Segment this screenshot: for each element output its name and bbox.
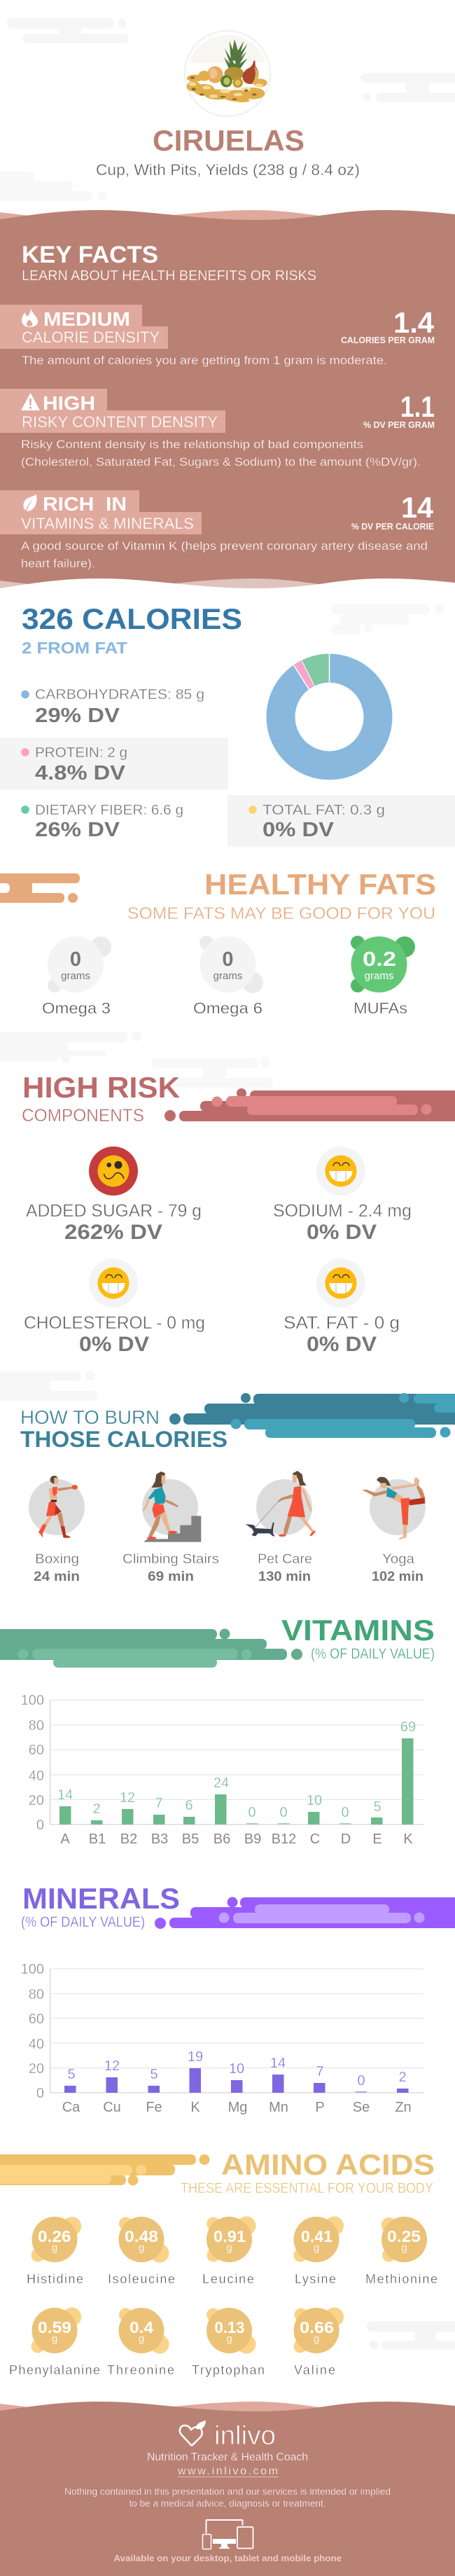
icon: happy face <box>98 1268 129 1299</box>
panel: amino acids <box>0 2148 438 2377</box>
bars <box>59 1738 413 1824</box>
subheading: healthy fats: SOME FATS MAY BE GOOD FOR YOU <box>127 904 435 923</box>
category labels <box>62 2100 412 2115</box>
subheading: percent of daily value: (% OF DAILY VALUE) <box>21 1914 145 1930</box>
icon: woman walking dog <box>246 1471 316 1537</box>
legend: dietary fiber: DIETARY FIBER: 6.6 g <box>35 803 183 818</box>
amino: isoleucine: g <box>139 2242 144 2254</box>
category labels: B9 <box>244 1831 261 1847</box>
decorative cloud: left below subtitle <box>0 172 106 201</box>
description: The amount of calories you are getting from 1 gram is moderate. <box>22 354 387 367</box>
y axis labels: 40 <box>29 2037 44 2052</box>
badge: omega 3 <box>42 936 111 1017</box>
value labels: 0 <box>279 1805 288 1820</box>
y axis labels: 60 <box>29 2011 44 2027</box>
heading: healthy fats: HEALTHY FATS <box>204 868 436 901</box>
badge: omega 3: 0 <box>70 948 81 971</box>
risk item: sodium: SODIUM - 2.4 mg <box>273 1201 412 1221</box>
badge: MUFAs: MUFAs <box>354 999 407 1017</box>
description: heart failure). <box>21 557 95 570</box>
fact: medium calorie density <box>0 305 435 367</box>
activity: yoga: Yoga <box>382 1552 414 1567</box>
description <box>21 438 421 469</box>
amino: lysine: g <box>314 2242 319 2254</box>
risk item: sodium: 0% DV <box>307 1221 377 1244</box>
disclaimer <box>64 2486 391 2509</box>
bars <box>64 2068 409 2093</box>
amino: methionine: g <box>401 2242 407 2254</box>
panel: how to burn <box>20 1393 455 1584</box>
value labels: 0 <box>341 1805 349 1820</box>
badge: omega 3: Omega 3 <box>42 999 111 1017</box>
amino: lysine: 0.41 <box>301 2227 332 2245</box>
decorative cloud: top left <box>7 18 129 43</box>
y axis labels: 0 <box>36 1817 44 1833</box>
amino: histidine: g <box>52 2242 57 2254</box>
label: vitamins and minerals: VITAMINS & MINERALS <box>21 515 194 532</box>
category labels: Mn <box>269 2100 288 2115</box>
decorative band: orange <box>0 873 80 903</box>
decorative band: red <box>164 1088 455 1121</box>
value labels: 24 <box>214 1775 229 1791</box>
icon: flame <box>22 308 38 327</box>
risk item: cholesterol <box>24 1259 205 1356</box>
activity: climbing stairs <box>122 1471 219 1584</box>
food photo <box>185 31 270 116</box>
amino: tryptophan <box>192 2308 265 2377</box>
chart grid <box>50 1700 424 1824</box>
amino: valine: Valine <box>294 2363 335 2377</box>
decorative band: green <box>0 1629 302 1668</box>
wave: key facts bottom <box>0 579 455 600</box>
y axis labels: 80 <box>29 1987 44 2002</box>
amino: isoleucine <box>108 2217 175 2286</box>
subheading: percent of daily value: (% OF DAILY VALUE) <box>311 1646 435 1662</box>
activity: boxing <box>29 1476 85 1584</box>
unit: % DV per calorie: % DV PER CALORIE <box>351 521 434 532</box>
y axis labels: 40 <box>29 1768 44 1784</box>
category labels: K <box>403 1831 413 1847</box>
icon: warning triangle <box>21 393 40 410</box>
legend: dietary fiber: 26% DV <box>35 819 120 841</box>
unit: calories per gram: CALORIES PER GRAM <box>341 335 435 345</box>
risk item: sodium <box>273 1147 412 1244</box>
category labels: B2 <box>120 1831 137 1847</box>
decorative band: yellow <box>0 2154 210 2185</box>
description: (Cholesterol, Saturated Fat, Sugars & Sodium) to the amount (%DV/gr). <box>21 455 421 469</box>
label: risky content density: RISKY CONTENT DENSITY <box>22 413 218 431</box>
category labels: C <box>310 1831 320 1847</box>
amino: threonine: g <box>139 2333 144 2345</box>
risk item: saturated fat: SAT. FAT - 0 g <box>284 1313 400 1333</box>
legend: protein: 4.8% DV <box>35 762 126 784</box>
value labels: 7 <box>316 2064 324 2079</box>
badge: omega 6 <box>193 936 263 1017</box>
y axis labels: 20 <box>29 1793 44 1808</box>
risk item: added sugar: 262% DV <box>64 1221 162 1244</box>
amino: histidine: Histidine <box>27 2272 83 2286</box>
category labels: Zn <box>395 2100 412 2115</box>
value labels: 0 <box>248 1805 256 1820</box>
heading: those calories: THOSE CALORIES <box>20 1427 227 1452</box>
activity: climbing stairs: 69 min <box>148 1570 194 1584</box>
y axis labels: 0 <box>36 2086 44 2101</box>
category labels: K <box>190 2100 200 2115</box>
value labels: 2 <box>92 1801 101 1817</box>
y axis labels: 100 <box>21 1693 44 1708</box>
legend: total fat: 0% DV <box>262 819 335 841</box>
category labels: Ca <box>62 2100 80 2115</box>
category labels: B3 <box>151 1831 168 1847</box>
value labels: 12 <box>120 1790 135 1806</box>
amino: histidine: 0.26 <box>38 2227 71 2245</box>
activity: yoga: 102 min <box>372 1570 424 1584</box>
decorative cloud: top right <box>360 73 455 102</box>
icon: leaf <box>23 494 36 511</box>
amino: threonine: 0.4 <box>130 2318 153 2336</box>
heading: how to burn: HOW TO BURN <box>20 1406 160 1428</box>
risk item: saturated fat <box>284 1259 400 1356</box>
icon: devices <box>203 2520 253 2549</box>
legend: protein <box>0 738 228 789</box>
disclaimer: to be a medical advice, diagnosis or treatment. <box>129 2498 326 2509</box>
icon: yoga pose <box>362 1477 425 1539</box>
amino: methionine <box>365 2217 438 2286</box>
amino: tryptophan: g <box>226 2333 232 2345</box>
amino: valine: 0.66 <box>300 2318 334 2336</box>
website link: www.inlivo.com <box>177 2465 278 2477</box>
label: calorie density: CALORIE DENSITY <box>22 328 160 346</box>
amino: lysine: Lysine <box>295 2272 336 2286</box>
amino: tryptophan: Tryptophan <box>192 2363 265 2377</box>
value labels: 5 <box>373 1799 382 1815</box>
heading: high risk: HIGH RISK <box>22 1071 180 1104</box>
activity: pet care: Pet Care <box>258 1552 312 1567</box>
amino: threonine <box>107 2308 174 2377</box>
y axis labels <box>21 1693 44 1833</box>
amino: valine: g <box>314 2333 319 2345</box>
amino: phenylalanine: 0.59 <box>38 2318 71 2336</box>
decorative cloud: beside calories <box>331 604 444 635</box>
y axis labels: 20 <box>29 2061 44 2077</box>
value labels <box>57 1719 416 1820</box>
amino: leucine: 0.91 <box>214 2227 246 2245</box>
logo: inlivo wordmark: inlivo <box>214 2421 276 2451</box>
value labels: 10 <box>229 2061 244 2077</box>
badge: MUFAs: grams <box>365 970 393 982</box>
subheading: components: COMPONENTS <box>22 1106 144 1126</box>
panel: key facts <box>0 210 455 588</box>
icon: happy face <box>325 1156 357 1186</box>
value labels: 19 <box>188 2049 203 2065</box>
number: 14: 14 <box>401 491 434 524</box>
disclaimer: Nothing contained in this presentation and our services is intended or implied <box>64 2486 391 2497</box>
heading: vitamins: VITAMINS <box>281 1614 435 1647</box>
number: 1.1: 1.1 <box>400 390 435 423</box>
heading: amino acids: AMINO ACIDS <box>221 2148 435 2181</box>
amino: tryptophan: 0.13 <box>214 2318 245 2336</box>
amino: histidine <box>27 2217 83 2286</box>
badge: omega 3: grams <box>61 970 90 982</box>
heading: minerals: MINERALS <box>22 1882 180 1915</box>
unit: % DV per gram: % DV PER GRAM <box>363 420 435 430</box>
decorative cloud: below fats <box>0 1032 141 1062</box>
y axis labels: 100 <box>21 1962 44 1977</box>
fact: high risky content density <box>0 389 435 469</box>
subheading: 2 from fat: 2 FROM FAT <box>22 639 127 657</box>
risk item: cholesterol: CHOLESTEROL - 0 mg <box>24 1313 205 1333</box>
panel: footer <box>0 2402 455 2576</box>
panel: healthy fats <box>0 868 436 1017</box>
risk item: cholesterol: 0% DV <box>79 1333 149 1356</box>
amino: isoleucine: 0.48 <box>125 2227 158 2245</box>
value labels: 14 <box>270 2056 286 2071</box>
amino: phenylalanine: g <box>52 2333 57 2345</box>
panel: calories <box>0 602 455 847</box>
icon: sad face <box>98 1156 129 1186</box>
category labels: D <box>341 1831 351 1847</box>
decorative cloud: above burn <box>0 1371 97 1401</box>
activity: pet care <box>246 1471 316 1584</box>
amino: methionine: Methionine <box>365 2272 438 2286</box>
value labels: 14 <box>57 1787 73 1803</box>
category labels: Fe <box>146 2100 162 2115</box>
category labels: E <box>372 1831 382 1847</box>
wave: footer top <box>0 2402 455 2576</box>
category labels: P <box>315 2100 325 2115</box>
category labels: Se <box>353 2100 370 2115</box>
badge: omega 6: Omega 6 <box>193 999 262 1017</box>
legend: carbohydrates <box>21 687 204 727</box>
legend: total fat: TOTAL FAT: 0.3 g <box>262 803 385 818</box>
amino: phenylalanine: Phenylalanine <box>9 2363 100 2377</box>
description: Risky Content density is the relationship of bad components <box>21 438 363 451</box>
donut chart <box>281 654 378 766</box>
legend: protein: PROTEIN: 2 g <box>35 745 127 761</box>
icon: woman on stairs <box>142 1471 201 1542</box>
legend: total fat <box>227 795 455 847</box>
badge: MUFAs <box>351 936 415 1017</box>
legend: carbohydrates: 29% DV <box>35 705 120 727</box>
category labels <box>60 1831 413 1847</box>
value labels: 12 <box>104 2058 120 2074</box>
y axis labels: 60 <box>29 1743 44 1758</box>
icon: boxer <box>38 1476 78 1538</box>
description <box>21 539 428 570</box>
category labels: A <box>60 1831 70 1847</box>
amino: isoleucine: Isoleucine <box>108 2272 175 2286</box>
value labels <box>67 2049 407 2089</box>
category labels: Cu <box>103 2100 121 2115</box>
amino: threonine: Threonine <box>107 2363 174 2377</box>
title: CIRUELAS <box>153 124 304 157</box>
amino: leucine: g <box>226 2242 232 2254</box>
category labels: Mg <box>228 2100 247 2115</box>
legend: dietary fiber <box>21 803 183 841</box>
decorative band: teal <box>169 1393 455 1438</box>
tagline: Nutrition Tracker & Health Coach <box>147 2451 308 2463</box>
y axis labels: 80 <box>29 1718 44 1733</box>
risk item: saturated fat: 0% DV <box>307 1333 377 1356</box>
value labels: 0 <box>357 2073 365 2089</box>
icon: happy face <box>325 1268 357 1299</box>
category labels: B1 <box>89 1831 106 1847</box>
risk item: added sugar <box>26 1147 202 1244</box>
legend: carbohydrates: CARBOHYDRATES: 85 g <box>35 687 204 702</box>
amino: leucine: Leucine <box>202 2272 254 2286</box>
y axis labels <box>21 1962 44 2101</box>
decorative band: purple <box>155 1897 455 1929</box>
number: 1.4: 1.4 <box>393 306 435 339</box>
bar chart: vitamins <box>21 1693 424 1847</box>
label: rich in: RICH IN <box>43 493 127 515</box>
decorative cloud: high risk <box>151 1058 273 1088</box>
panel: high risk <box>22 1071 455 1356</box>
badge: omega 6: grams <box>214 970 242 982</box>
wave: key facts top <box>0 210 455 588</box>
decorative cloud: amino right <box>367 2321 455 2350</box>
serving subtitle: Cup, With Pits, Yields (238 g / 8.4 oz) <box>96 161 360 179</box>
category labels: B12 <box>272 1831 296 1847</box>
subheading: key facts: LEARN ABOUT HEALTH BENEFITS OR RISKS <box>22 268 316 284</box>
logo: inlivo heart <box>180 2421 206 2446</box>
amino: phenylalanine <box>9 2307 100 2377</box>
description: A good source of Vitamin K (helps prevent coronary artery disease and <box>21 539 428 553</box>
label: high: HIGH <box>43 392 95 414</box>
amino: valine <box>294 2307 344 2377</box>
chart grid <box>50 1969 424 2093</box>
panel: vitamins <box>0 1614 435 1847</box>
badge: MUFAs: 0.2 <box>363 948 396 971</box>
activity: boxing: Boxing <box>35 1552 79 1567</box>
heading: key facts: KEY FACTS <box>22 242 158 268</box>
amino: leucine <box>202 2216 256 2286</box>
risk item: added sugar: ADDED SUGAR - 79 g <box>26 1201 202 1221</box>
activity: boxing: 24 min <box>34 1570 80 1584</box>
bar chart: minerals <box>21 1962 424 2115</box>
badge: omega 6: 0 <box>222 948 234 971</box>
category labels: B6 <box>214 1831 230 1847</box>
heading: 326 calories: 326 CALORIES <box>22 602 242 635</box>
availability note: Available on your desktop, tablet and mobile phone <box>113 2553 342 2563</box>
value labels: 10 <box>307 1793 322 1808</box>
value labels: 6 <box>185 1798 193 1813</box>
value labels: 69 <box>400 1719 416 1735</box>
dried fruit pile <box>187 71 267 102</box>
amino: lysine <box>294 2216 344 2286</box>
activity: yoga <box>362 1477 426 1584</box>
value labels: 5 <box>67 2067 76 2082</box>
category labels: B5 <box>182 1831 199 1847</box>
label: medium: MEDIUM <box>43 308 130 330</box>
value labels: 2 <box>398 2070 407 2085</box>
pineapple leaves <box>224 39 248 74</box>
activity: pet care: 130 min <box>258 1570 311 1584</box>
fact: rich in vitamins and minerals <box>0 490 434 570</box>
value labels: 5 <box>150 2067 158 2082</box>
value labels: 7 <box>155 1796 163 1811</box>
activity: climbing stairs: Climbing Stairs <box>122 1552 219 1567</box>
amino: methionine: 0.25 <box>387 2227 421 2245</box>
panel: minerals <box>21 1882 455 2115</box>
